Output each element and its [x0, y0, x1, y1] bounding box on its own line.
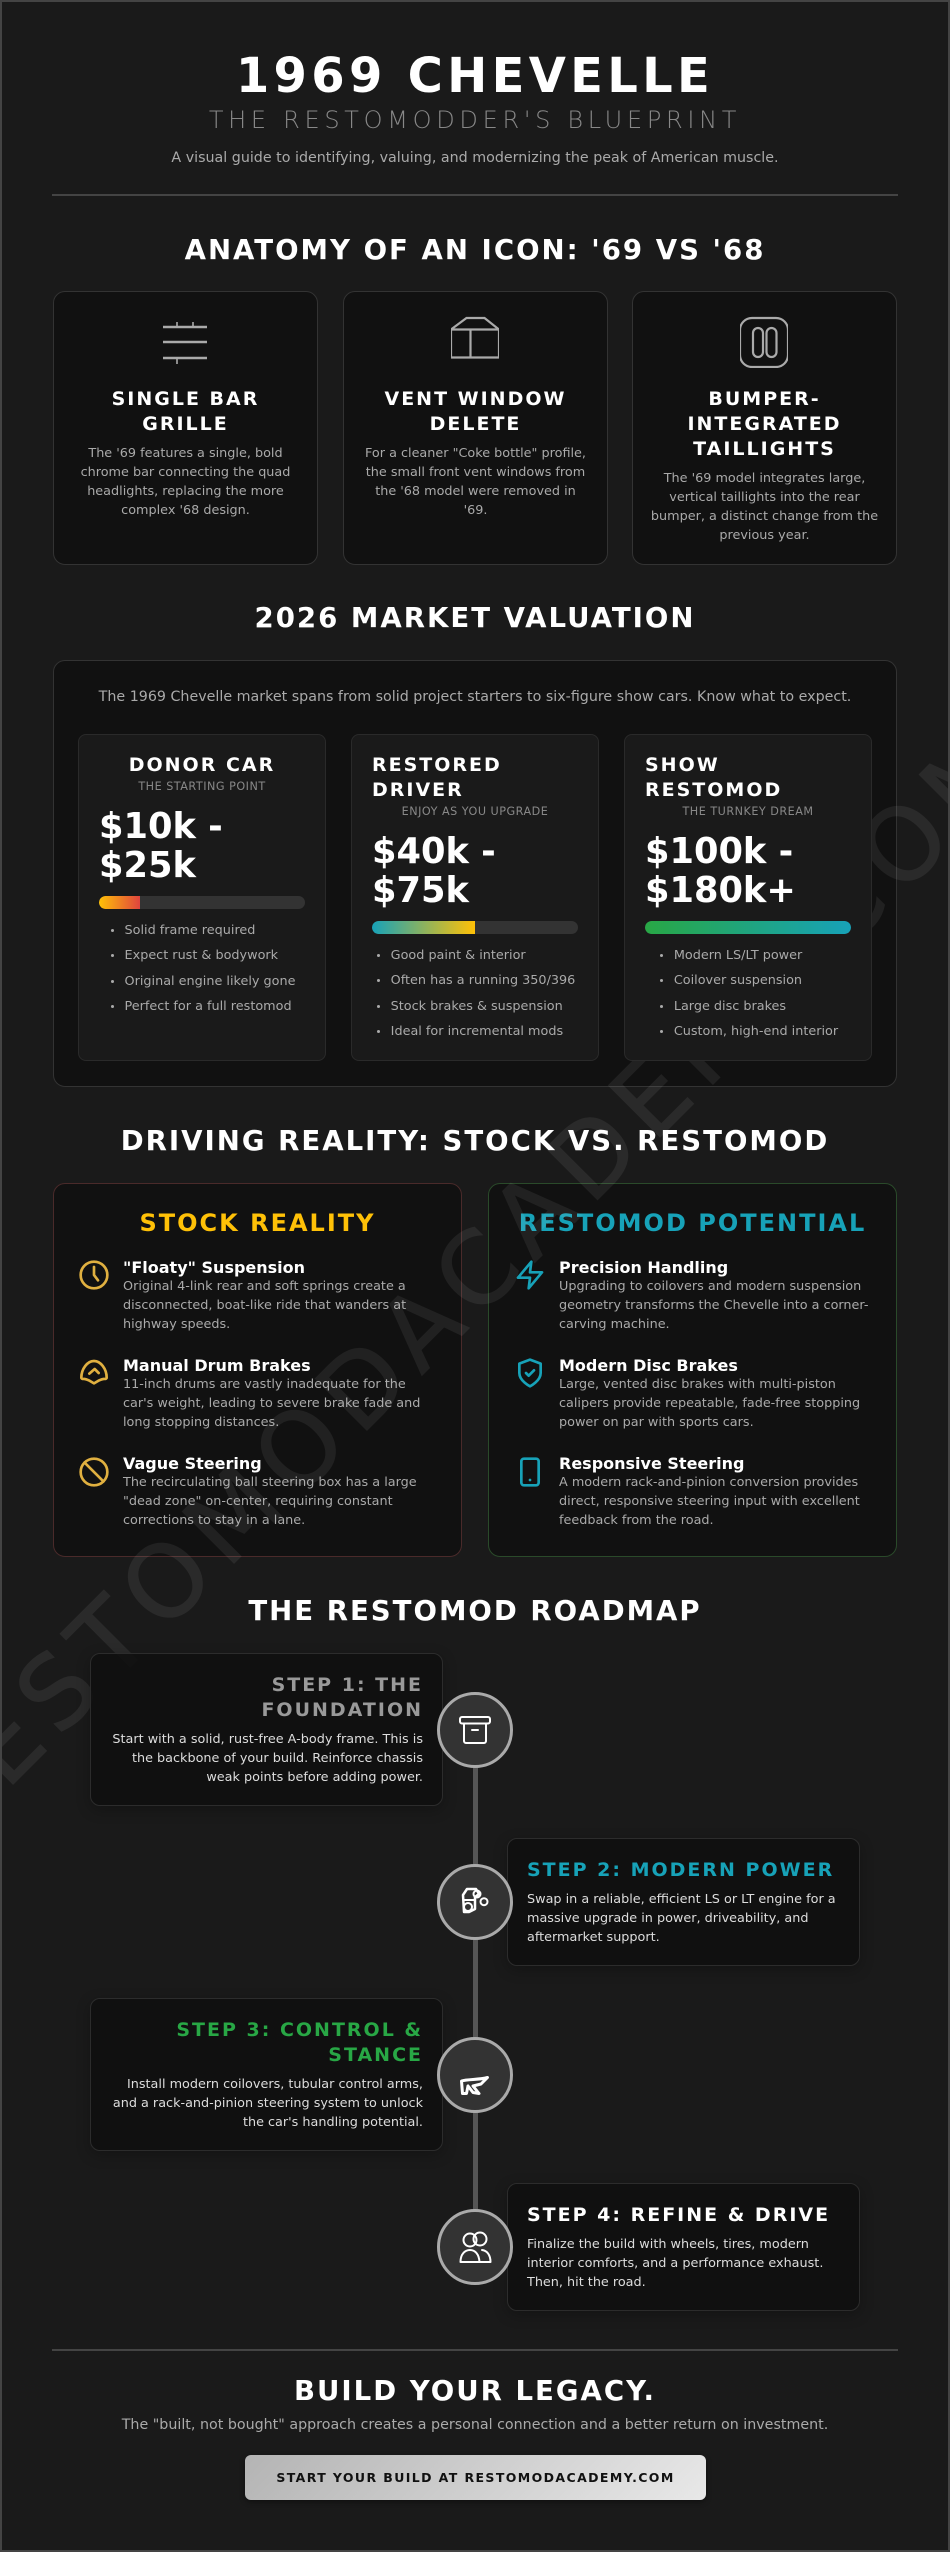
step title: STEP 2: MODERN POWER: [527, 1859, 834, 1881]
icon: brake gauge: [80, 1360, 108, 1385]
panel heading: RESTOMOD POTENTIAL: [519, 1209, 866, 1237]
step text: Finalize the build with wheels, tires, modern interior comforts, and a performance exhaust. Then, hit the road.: [527, 2237, 823, 2290]
item: manual drum brakes: 11-inch drums are vastly inadequate for the car's weight, leading to severe brake fade and long stopping distances.: [123, 1377, 420, 1430]
tier: show restomod: [624, 734, 872, 1061]
market intro text: The 1969 Chevelle market spans from solid project starters to six-figure show cars. Know what to expect.: [99, 689, 851, 705]
panel: bumper-integrated taillights: [632, 291, 897, 565]
item: vague steering: The recirculating ball steering box has a large "dead zone" on-center, requiring constant corrections to stay in a lane.: [123, 1475, 417, 1528]
panel heading: STOCK REALITY: [139, 1209, 376, 1237]
price: $10k - $25k: [99, 806, 223, 886]
feature list: Solid frame required: [125, 923, 255, 938]
icon: ban: [79, 1457, 109, 1487]
step text: Install modern coilovers, tubular control arms, and a rack-and-pinion steering system to unlock the car's handling potential.: [113, 2077, 423, 2130]
step 1 node: archive icon: [437, 1692, 513, 1768]
feature list: Coilover suspension: [674, 973, 802, 988]
tier: donor car: [78, 734, 326, 1061]
icon: grille: [163, 322, 207, 364]
feature list: Often has a running 350/396: [391, 973, 575, 988]
value bar: [99, 896, 305, 909]
item: manual drum brakes: Manual Drum Brakes: [123, 1356, 311, 1375]
feature list: [660, 948, 838, 1039]
feature list: [377, 948, 575, 1039]
step text: Swap in a reliable, efficient LS or LT engine for a massive upgrade in power, driveability, and aftermarket support.: [527, 1892, 836, 1945]
icon: clock: [79, 1260, 109, 1290]
heading: anatomy: ANATOMY OF AN ICON: '69 VS '68: [185, 233, 765, 266]
item: vague steering: Vague Steering: [123, 1454, 262, 1473]
feature list: Modern LS/LT power: [674, 948, 802, 963]
footer heading: BUILD YOUR LEGACY.: [294, 2374, 656, 2407]
feature list: Original engine likely gone: [125, 974, 295, 988]
panel: restomod potential: [488, 1183, 897, 1557]
item: floaty suspension: Original 4-link rear and soft springs create a disconnected, boat-like ride that wanders at highway speeds.: [123, 1279, 406, 1332]
step title: STEP 4: REFINE & DRIVE: [527, 2204, 830, 2226]
step title: STEP 1: THE FOUNDATION: [261, 1674, 423, 1721]
panel: single bar grille: [53, 291, 318, 565]
panel: market valuation: [53, 660, 897, 1087]
tier subtitle: THE TURNKEY DREAM: [682, 805, 814, 818]
item: precision handling: Precision Handling: [559, 1258, 728, 1277]
panel: vent window delete: [343, 291, 608, 565]
icon: bolt: [516, 1260, 544, 1290]
price: $100k - $180k+: [645, 831, 796, 911]
feature list: Large disc brakes: [674, 998, 786, 1014]
card text: For a cleaner "Coke bottle" profile, the small front vent windows from the '68 model were removed in '69.: [365, 446, 586, 518]
feature list: Good paint & interior: [391, 948, 526, 963]
value bar: [645, 921, 851, 934]
feature list: Expect rust & bodywork: [125, 948, 278, 963]
item: modern disc brakes: Modern Disc Brakes: [559, 1356, 738, 1375]
feature list: Custom, high-end interior: [674, 1024, 838, 1039]
card title: SINGLE BAR GRILLE: [112, 388, 259, 435]
step 1 card: [90, 1653, 443, 1806]
footer text: The "built, not bought" approach creates a personal connection and a better return on investment.: [122, 2417, 828, 2433]
feature list: [111, 923, 295, 1014]
panel: stock reality: [53, 1183, 462, 1557]
item: precision handling: Upgrading to coilovers and modern suspension geometry transforms the Chevelle into a corner-carving machine.: [559, 1279, 868, 1332]
step 4 node: users icon: [437, 2209, 513, 2285]
step text: Start with a solid, rust-free A-body frame. This is the backbone of your build. Reinforce chassis weak points before adding power.: [112, 1732, 423, 1785]
title: 1969 CHEVELLE: [236, 48, 714, 104]
step title: STEP 3: CONTROL & STANCE: [176, 2019, 423, 2066]
tier title: RESTORED DRIVER: [372, 754, 502, 801]
icon: phone: [520, 1457, 540, 1487]
icon: shield check: [518, 1358, 542, 1388]
tier subtitle: ENJOY AS YOU UPGRADE: [402, 805, 548, 818]
value bar: [372, 921, 578, 934]
feature list: Stock brakes & suspension: [391, 998, 563, 1014]
icon: taillights: [740, 316, 788, 368]
step 3 card: [90, 1998, 443, 2151]
tagline: A visual guide to identifying, valuing, and modernizing the peak of American muscle.: [171, 150, 779, 166]
card title: VENT WINDOW DELETE: [384, 388, 566, 435]
step 4 card: [507, 2183, 860, 2311]
timeline line: [472, 1760, 478, 2220]
heading: market valuation: 2026 MARKET VALUATION: [254, 601, 695, 634]
step 2 node: engine icon: [437, 1864, 513, 1940]
heading: roadmap: THE RESTOMOD ROADMAP: [248, 1594, 702, 1627]
tier subtitle: THE STARTING POINT: [138, 780, 266, 793]
card text: The '69 model integrates large, vertical taillights into the rear bumper, a distinct change from the previous year.: [651, 471, 878, 543]
price: $40k - $75k: [372, 831, 496, 911]
subtitle: THE RESTOMODDER'S BLUEPRINT: [209, 106, 741, 134]
item: responsive steering: Responsive Steering: [559, 1454, 744, 1473]
item: floaty suspension: "Floaty" Suspension: [123, 1258, 305, 1277]
item: modern disc brakes: Large, vented disc brakes with multi-piston calipers provide repeatable, fade-free stopping power on par with sports cars.: [559, 1377, 860, 1430]
call to action button: [245, 2455, 706, 2500]
card title: BUMPER-INTEGRATED TAILLIGHTS: [687, 388, 842, 460]
tier: restored driver: [351, 734, 599, 1061]
step 2 card: [507, 1838, 860, 1966]
call to action button: START YOUR BUILD AT RESTOMODACADEMY.COM: [276, 2470, 675, 2485]
step 3 node: suspension icon: [437, 2037, 513, 2113]
tier title: DONOR CAR: [129, 754, 275, 776]
feature list: Perfect for a full restomod: [125, 999, 292, 1014]
heading: driving reality: DRIVING REALITY: STOCK VS. RESTOMOD: [121, 1124, 829, 1157]
item: responsive steering: A modern rack-and-pinion conversion provides direct, responsive steering input with excellent feedback from the road.: [559, 1475, 860, 1528]
icon: vent window: [451, 316, 499, 359]
card text: The '69 features a single, bold chrome bar connecting the quad headlights, replacing the more complex '68 design.: [81, 446, 290, 518]
tier title: SHOW RESTOMOD: [645, 754, 782, 801]
feature list: Ideal for incremental mods: [391, 1024, 563, 1039]
